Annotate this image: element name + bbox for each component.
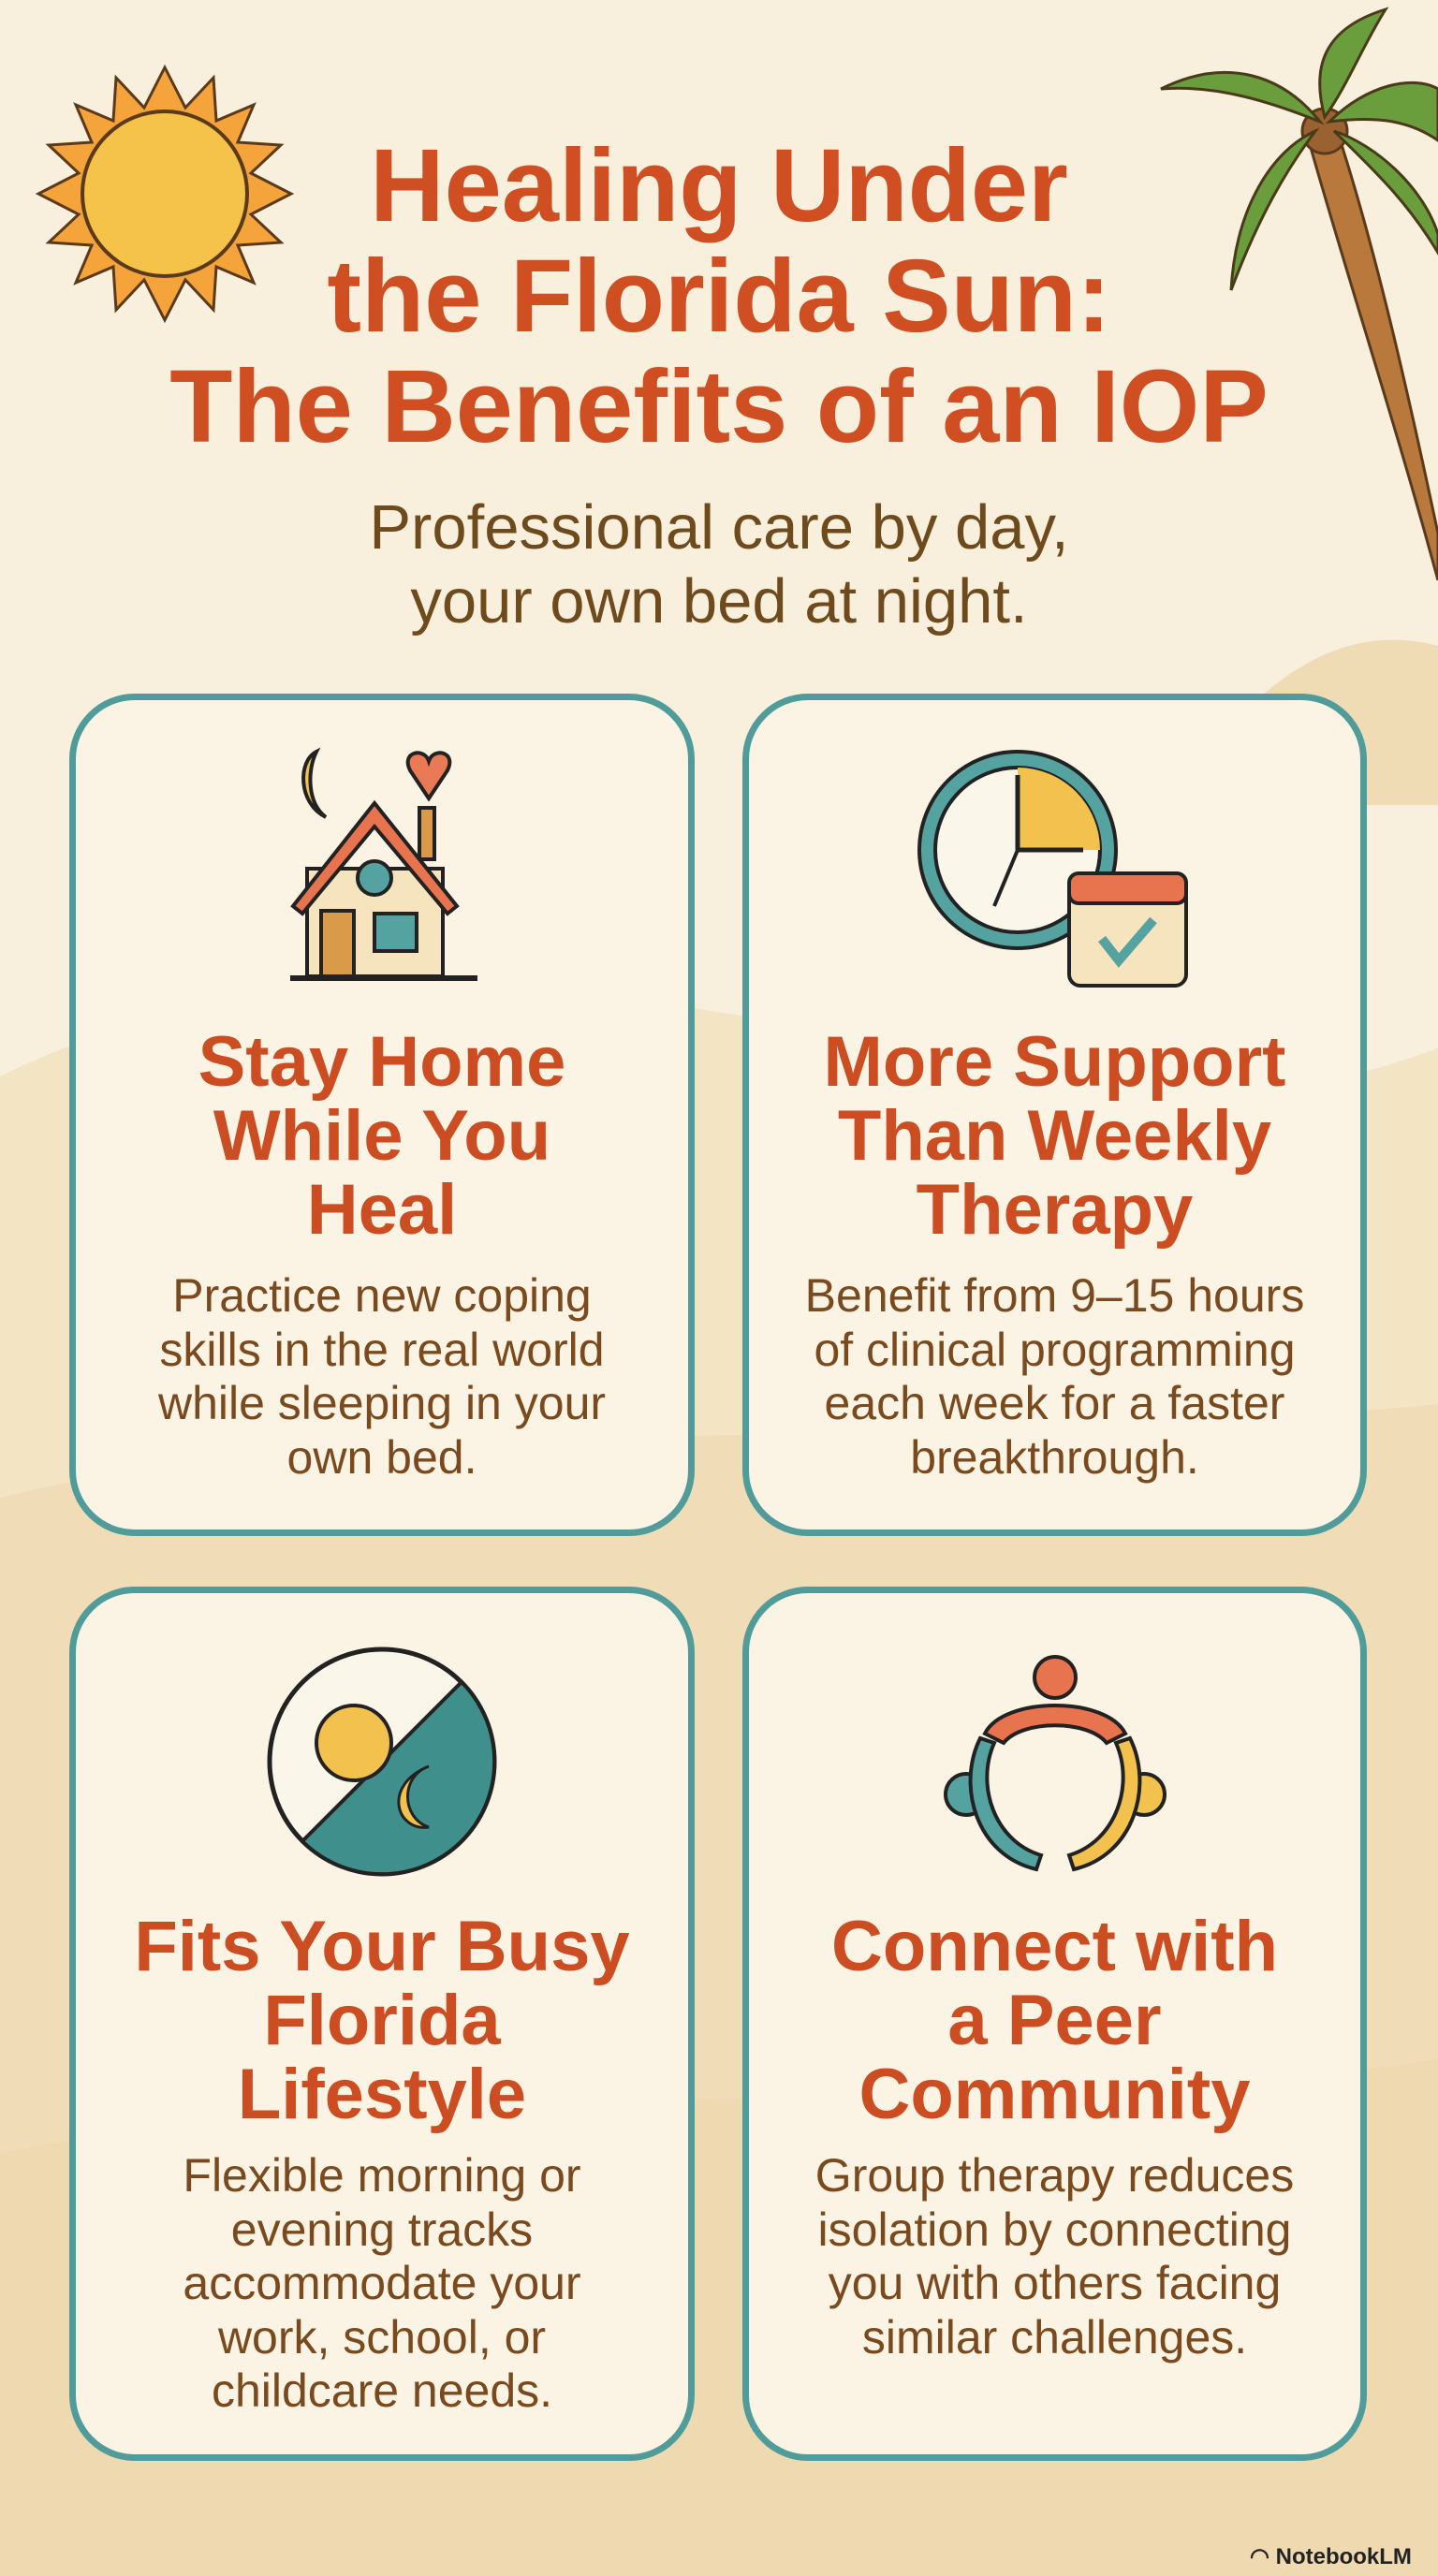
heading: Community xyxy=(859,2055,1251,2134)
body text: childcare needs. xyxy=(212,2364,552,2417)
title: the Florida Sun: xyxy=(327,239,1111,354)
body text: skills in the real world xyxy=(159,1324,605,1376)
body text: evening tracks xyxy=(231,2203,533,2256)
body text: you with others facing xyxy=(829,2257,1281,2309)
body text: Practice new coping xyxy=(172,1269,592,1322)
logo: NotebookLM: ◠ NotebookLM xyxy=(1250,2544,1412,2569)
heading: Connect with xyxy=(831,1907,1278,1986)
body text: while sleeping in your xyxy=(158,1377,606,1429)
subtitle: your own bed at night. xyxy=(410,566,1028,637)
icon: people circle xyxy=(944,1655,1167,1872)
body text xyxy=(183,2149,581,2417)
body text: breakthrough. xyxy=(910,1430,1199,1483)
icon: palm tree xyxy=(1160,7,1438,580)
subtitle xyxy=(369,492,1069,637)
title xyxy=(169,128,1269,464)
panel: more support xyxy=(742,694,1367,1536)
heading: Fits Your Busy xyxy=(134,1907,630,1986)
heading: Therapy xyxy=(917,1170,1193,1250)
body text: Group therapy reduces xyxy=(815,2149,1294,2202)
subtitle: Professional care by day, xyxy=(369,492,1069,563)
heading: Florida xyxy=(263,1981,501,2060)
body text: each week for a faster xyxy=(825,1377,1284,1429)
heading: Than Weekly xyxy=(838,1096,1271,1176)
body text xyxy=(805,1269,1304,1483)
heading: While You xyxy=(213,1096,550,1176)
heading: Stay Home xyxy=(198,1022,565,1102)
icon: day and night xyxy=(268,1647,496,1876)
icon: sun xyxy=(36,64,294,324)
body text: own bed. xyxy=(287,1430,477,1483)
panel: lifestyle xyxy=(69,1587,695,2461)
title: The Benefits of an IOP xyxy=(169,349,1269,464)
body text xyxy=(158,1269,606,1483)
heading: Lifestyle xyxy=(238,2055,526,2134)
heading xyxy=(134,1907,630,2134)
heading: Heal xyxy=(307,1170,457,1250)
panel: peer community xyxy=(742,1587,1367,2461)
title: Healing Under xyxy=(370,128,1068,243)
heading xyxy=(198,1022,565,1250)
heading xyxy=(831,1907,1278,2134)
body text: Benefit from 9–15 hours xyxy=(805,1269,1304,1322)
body text: Flexible morning or xyxy=(183,2149,581,2202)
body text: accommodate your xyxy=(183,2257,581,2309)
heading: More Support xyxy=(824,1022,1285,1102)
body text: similar challenges. xyxy=(862,2310,1247,2363)
icon: clock and calendar xyxy=(917,750,1188,988)
body text: work, school, or xyxy=(218,2310,546,2363)
body text: isolation by connecting xyxy=(818,2203,1291,2256)
panel: stay home xyxy=(69,694,695,1536)
body text xyxy=(815,2149,1294,2363)
heading xyxy=(824,1022,1285,1250)
body text: of clinical programming xyxy=(814,1324,1296,1376)
icon: house xyxy=(290,747,477,981)
heading: a Peer xyxy=(947,1981,1162,2060)
